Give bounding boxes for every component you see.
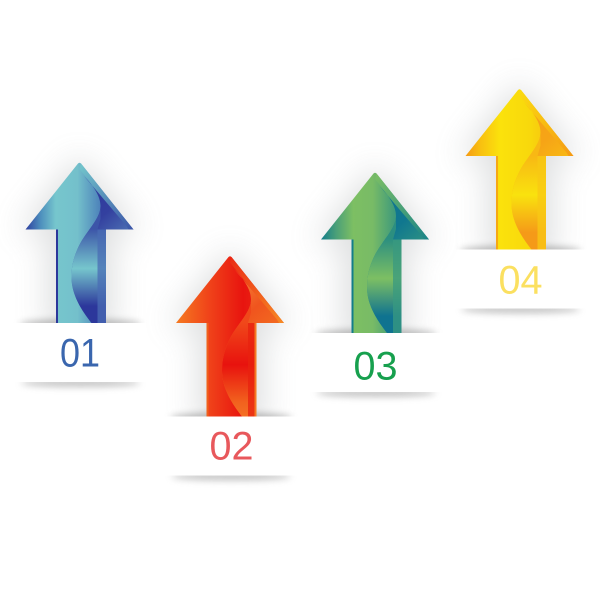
number 03: 03 (354, 344, 398, 388)
number 01: 01 (60, 332, 100, 376)
arrow 03 with label (313, 165, 437, 397)
number 04: 04 (498, 258, 542, 302)
number 02: 02 (210, 424, 254, 468)
arrow 02 with label (168, 248, 292, 480)
arrow 04 with label (458, 82, 582, 314)
arrow 01 with label (18, 155, 142, 387)
